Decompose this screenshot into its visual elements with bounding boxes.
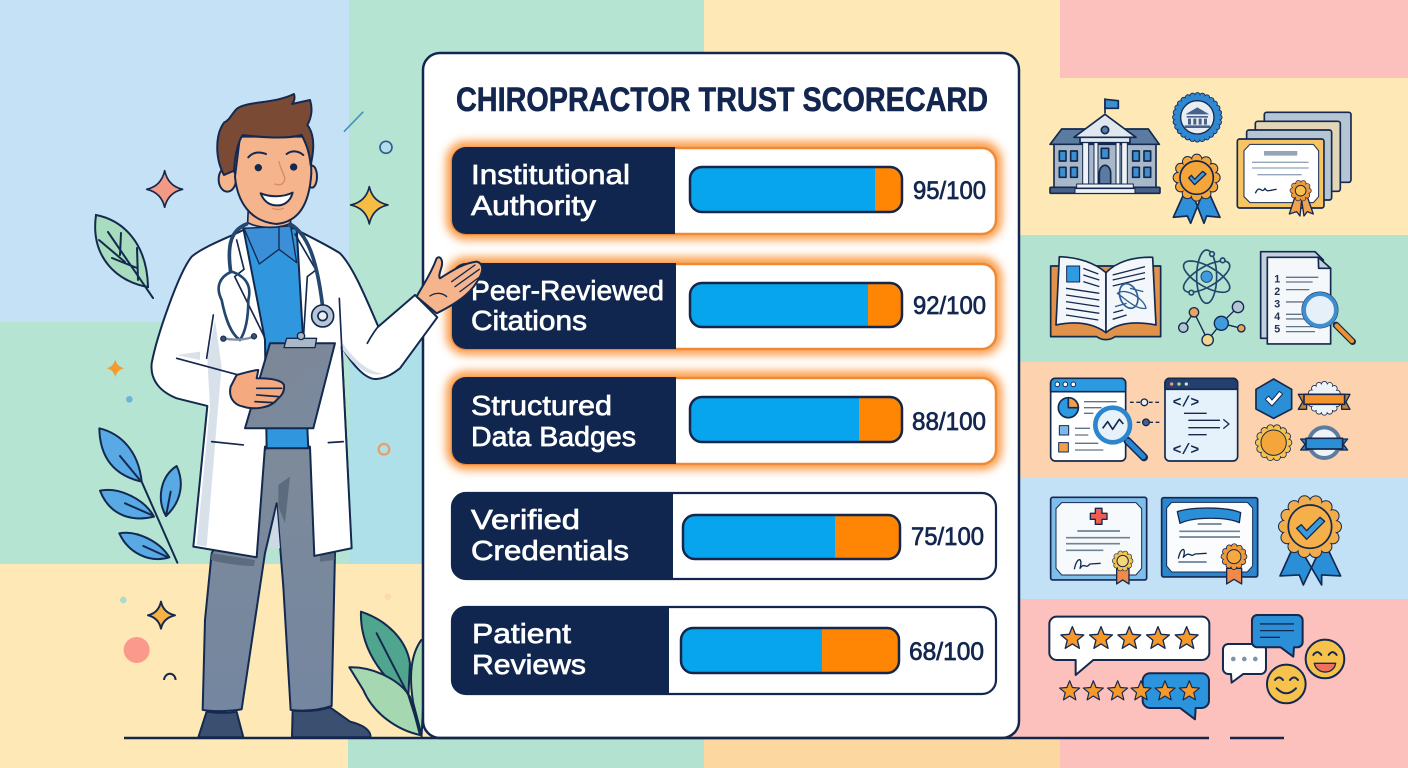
hair	[217, 94, 313, 175]
row: Structured Data Badges 88/100: Data Badges	[471, 421, 636, 452]
icon: open book	[1051, 257, 1161, 340]
row: Patient Reviews 68/100: Patient	[472, 618, 571, 649]
left hand	[230, 370, 284, 408]
icon: code window: </>	[1173, 396, 1200, 412]
icon: smiley faces	[1267, 640, 1344, 703]
small decorations lower left	[120, 593, 391, 680]
icon: numbered document with magnifier: 1	[1274, 274, 1280, 286]
collar	[244, 226, 297, 264]
coat lapel lines	[177, 234, 378, 480]
icon: verified rosette	[1280, 501, 1341, 585]
icon: blue leaf branch	[99, 428, 181, 563]
right hand	[417, 257, 482, 313]
coat shading	[177, 320, 383, 547]
neck	[248, 208, 291, 227]
icon: structured data badges	[1256, 379, 1350, 458]
icon: green leaf top left	[95, 215, 153, 298]
icon: code window	[1165, 378, 1238, 461]
icon: stacked certificates	[1237, 112, 1351, 216]
row: Peer-Reviewed Citations 92/100: Peer-Reviewed	[471, 275, 664, 306]
title: CHIROPRACTOR TRUST SCORECARD	[456, 81, 988, 119]
icon: star rating bubbles	[1049, 617, 1209, 719]
icon: bank seal	[1175, 95, 1219, 139]
stethoscope	[219, 224, 334, 341]
icon: network graph	[1179, 301, 1245, 346]
shirt	[243, 228, 308, 448]
icon: browser with magnifier	[1051, 378, 1162, 461]
inner coat lining	[268, 507, 280, 548]
icon: numbered document with magnifier: 3	[1274, 298, 1280, 310]
row: Institutional Authority 95/100	[452, 147, 996, 234]
icon: numbered document with magnifier	[1261, 252, 1353, 344]
row: Peer-Reviewed Citations 92/100	[452, 263, 996, 349]
trouser shadows	[211, 477, 334, 566]
icon: orange check badge	[1173, 159, 1220, 223]
icon: numbered document with magnifier: 4	[1274, 311, 1280, 323]
row: Peer-Reviewed Citations 92/100: 92/100	[913, 292, 986, 320]
icon: university building	[1050, 98, 1160, 193]
icon: atom	[1179, 250, 1234, 303]
row: Structured Data Badges 88/100: Structured	[471, 390, 612, 421]
row: Institutional Authority 95/100: Authority	[471, 190, 596, 221]
clipboard	[245, 343, 335, 428]
shoes	[198, 707, 371, 737]
row: Structured Data Badges 88/100	[452, 377, 996, 464]
face	[235, 137, 311, 224]
icon: diploma certificate	[1162, 498, 1258, 584]
eyes and brows	[248, 151, 303, 210]
icon: medical certificate	[1051, 497, 1147, 584]
row: Institutional Authority 95/100: 95/100	[913, 177, 986, 205]
ears	[219, 167, 236, 192]
icon: green plant at panel edge	[349, 612, 427, 737]
trousers	[203, 447, 335, 711]
row: Verified Credentials 75/100: Credentials	[471, 535, 629, 566]
icon: numbered document with magnifier: 5	[1274, 323, 1280, 335]
row: Verified Credentials 75/100	[452, 492, 996, 580]
floor line	[124, 737, 1284, 739]
row: Peer-Reviewed Citations 92/100: Citations	[471, 305, 587, 336]
row: Patient Reviews 68/100	[452, 606, 996, 694]
row: Verified Credentials 75/100: Verified	[471, 504, 580, 535]
row: Institutional Authority 95/100: Institutional	[471, 159, 630, 190]
row: Structured Data Badges 88/100: 88/100	[912, 408, 986, 436]
illustration: doctor	[151, 94, 482, 737]
icon: numbered document with magnifier: 2	[1274, 286, 1280, 298]
row: Patient Reviews 68/100: 68/100	[909, 638, 984, 666]
icon: chat bubbles	[1223, 615, 1303, 683]
coat	[151, 228, 437, 557]
row: Patient Reviews 68/100: Reviews	[472, 649, 586, 680]
icon: code window: </>	[1173, 443, 1200, 459]
mouth	[261, 193, 293, 205]
row: Verified Credentials 75/100: 75/100	[911, 523, 984, 551]
decorative sparkles and dots around the doctor	[107, 112, 392, 455]
